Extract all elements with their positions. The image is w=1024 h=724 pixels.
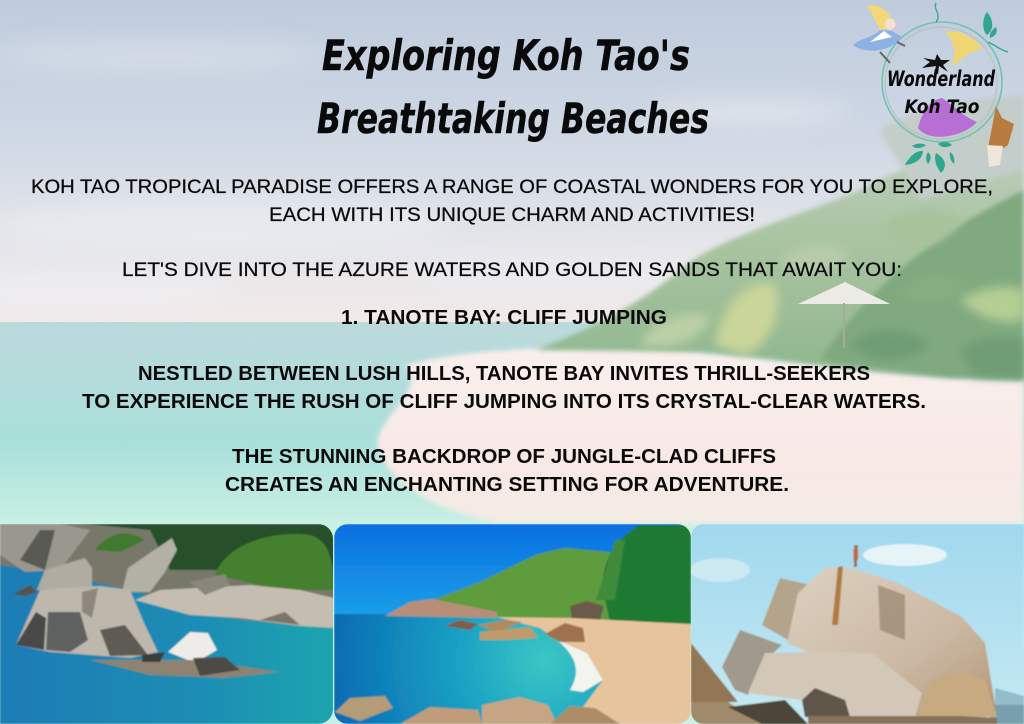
logo: Wonderland Koh Tao: Koh Tao	[904, 96, 980, 118]
section heading: 1. TANOTE BAY: CLIFF JUMPING	[341, 307, 667, 329]
description text: CREATES AN ENCHANTING SETTING FOR ADVENTURE.	[225, 474, 789, 496]
intro text: KOH TAO TROPICAL PARADISE OFFERS A RANGE OF COASTAL WONDERS FOR YOU TO EXPLORE,	[31, 176, 993, 198]
icon: white rabbit	[987, 106, 1014, 167]
title: Breathtaking Beaches	[317, 94, 709, 143]
description text: TO EXPERIENCE THE RUSH OF CLIFF JUMPING INTO ITS CRYSTAL-CLEAR WATERS.	[82, 391, 926, 413]
title	[317, 31, 709, 143]
description text: THE STUNNING BACKDROP OF JUNGLE-CLAD CLIFFS	[232, 446, 776, 468]
icon: teal sprig	[935, 3, 1008, 52]
logo: Wonderland Koh Tao	[853, 3, 1014, 173]
foliage texture	[640, 210, 1024, 378]
intro text: LET'S DIVE INTO THE AZURE WATERS AND GOLDEN SANDS THAT AWAIT YOU:	[122, 259, 902, 281]
title: Exploring Koh Tao's	[322, 31, 690, 80]
icon: purple watercolor	[918, 98, 977, 137]
description text	[82, 363, 926, 496]
icon: yellow watercolor	[945, 31, 983, 67]
icon: leaves	[905, 12, 997, 173]
icon: palm tree	[922, 54, 950, 74]
photo: Tanote Bay beach	[334, 524, 691, 724]
icon: Alice	[853, 5, 905, 63]
photo: cliff jumping rock	[690, 524, 1024, 724]
description text: NESTLED BETWEEN LUSH HILLS, TANOTE BAY INVITES THRILL-SEEKERS	[138, 363, 870, 385]
umbrella	[798, 282, 890, 348]
photo: rocky coastline	[0, 524, 334, 724]
boulders	[16, 586, 158, 658]
intro text	[31, 176, 993, 281]
intro text: EACH WITH ITS UNIQUE CHARM AND ACTIVITIES!	[269, 204, 755, 226]
figure: jumper on rock	[854, 545, 858, 567]
